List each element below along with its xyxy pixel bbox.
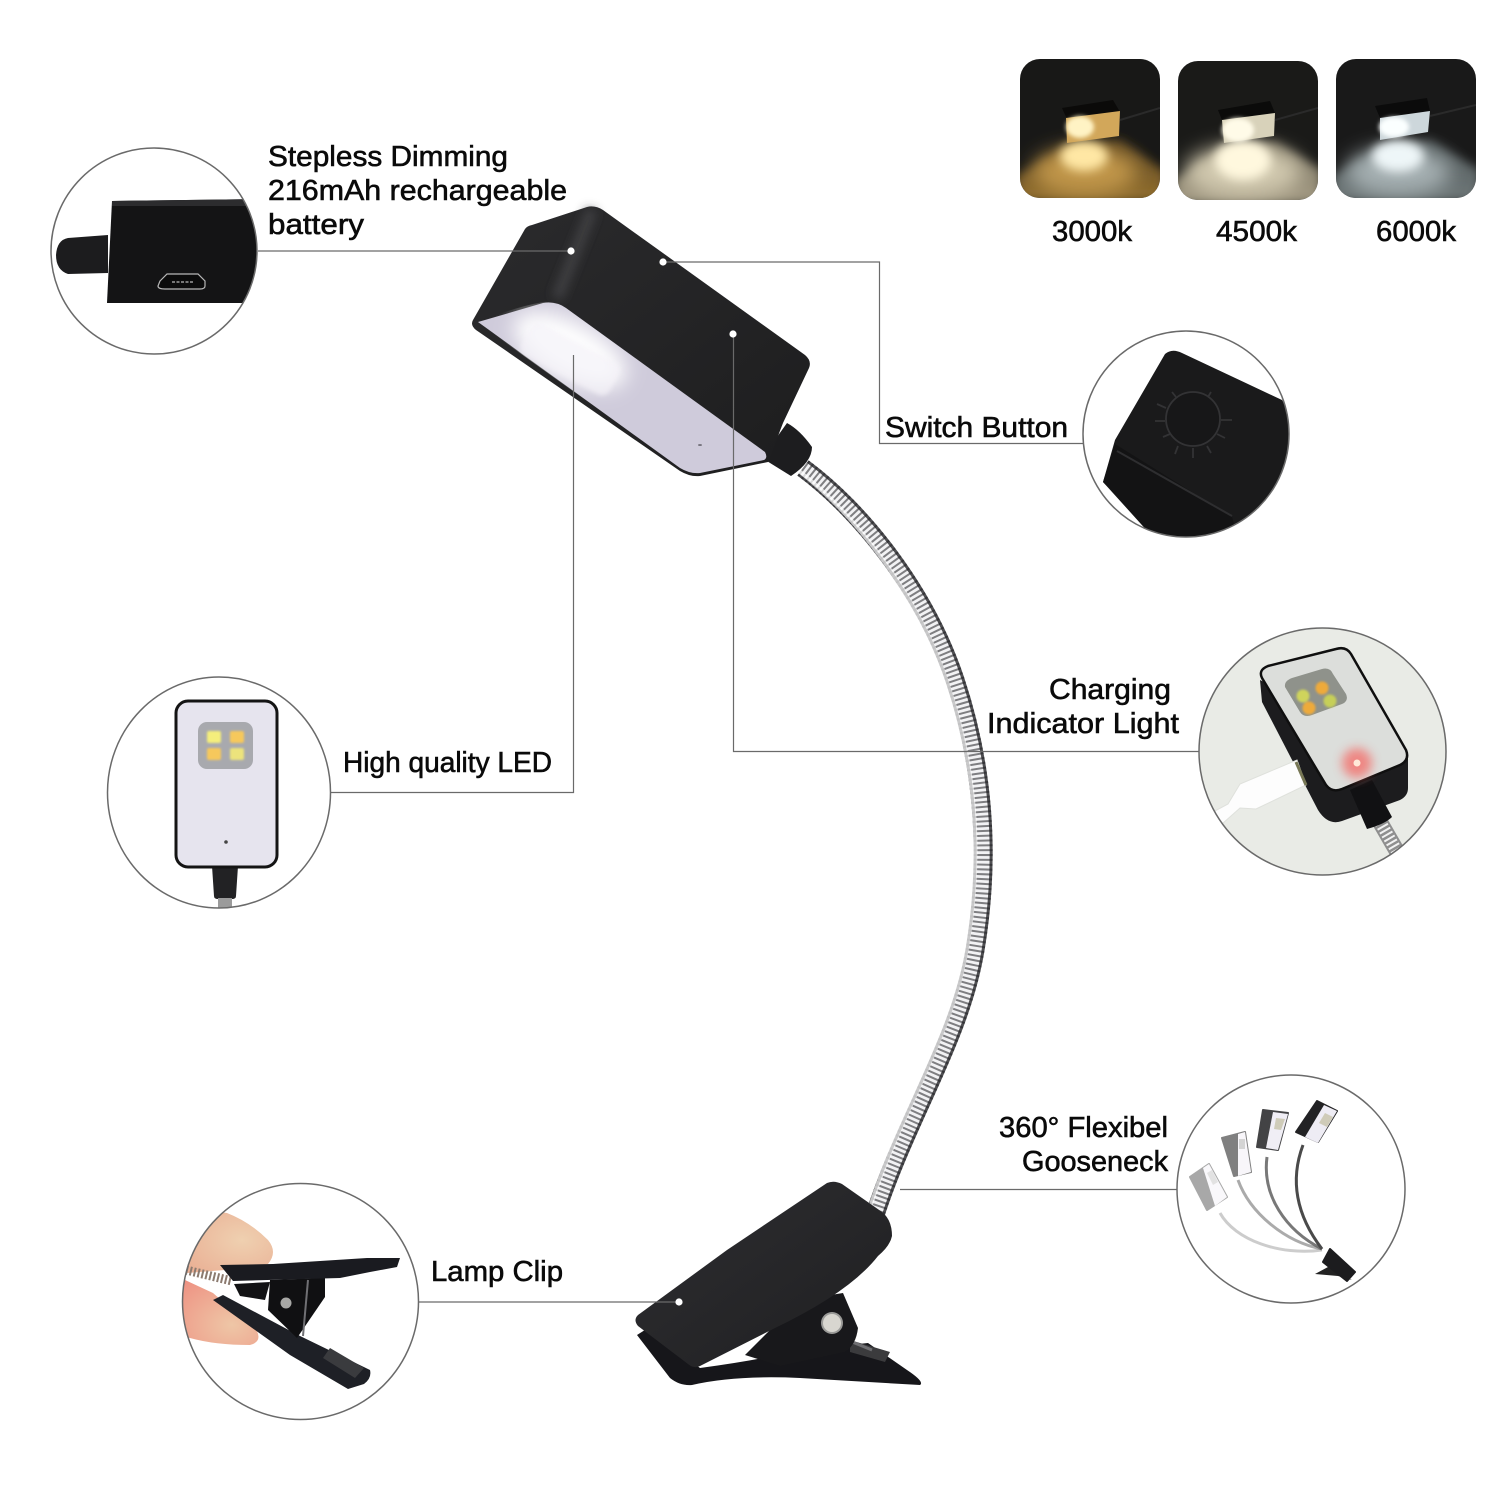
swatch photo 3000k <box>1016 59 1166 202</box>
label: 360 flexible gooseneck: Gooseneck <box>1022 1146 1168 1178</box>
lamp head ridge highlight <box>557 210 592 298</box>
label: 360 flexible gooseneck: 360° Flexibel <box>999 1112 1168 1144</box>
lamp glow <box>502 296 638 404</box>
callout: high quality LED <box>108 677 552 910</box>
clip top plate <box>636 1182 892 1367</box>
swatch label 3000k: 3000k <box>1052 216 1133 248</box>
inset circle: lamp positions <box>1177 1075 1405 1303</box>
label: stepless dimming <box>268 141 567 241</box>
lamp position 4 <box>1296 1101 1337 1249</box>
indicator pinhole <box>698 444 702 446</box>
label: charging indicator light <box>987 674 1179 740</box>
gooseneck arm <box>799 468 983 1218</box>
color temperature swatch: 4500k <box>1174 61 1322 248</box>
lamp position 1 <box>1190 1164 1322 1251</box>
swatch label 4500k: 4500k <box>1216 216 1298 248</box>
swatch label 6000k: 6000k <box>1376 216 1457 248</box>
inset circle: switch button <box>1083 331 1295 545</box>
swatch photo 6000k <box>1332 59 1480 202</box>
small clip <box>1315 1249 1355 1281</box>
clip pivot <box>745 1293 858 1366</box>
callout: flexible gooseneck <box>999 1075 1405 1303</box>
product: gooseneck lamp <box>472 206 983 1385</box>
clip spring details <box>835 1335 890 1362</box>
inset circle: micro USB port <box>51 148 262 354</box>
callout: lamp clip <box>170 1184 563 1420</box>
callout: switch button <box>885 331 1295 545</box>
inset circle: LED panel <box>108 677 330 910</box>
lamp head body <box>472 206 810 476</box>
lamp position 2 <box>1222 1132 1322 1249</box>
label: stepless dimming: battery <box>268 209 365 241</box>
indicator LED glow <box>1342 748 1372 778</box>
color temperature swatch: 3000k <box>1016 59 1166 248</box>
inset circle: hand pressing clip <box>170 1184 418 1420</box>
label: 360 flexible gooseneck <box>999 1112 1168 1178</box>
lamp light panel <box>478 303 766 473</box>
callout: charging indicator light <box>987 625 1450 880</box>
label: charging indicator light: Indicator Light <box>987 708 1179 740</box>
icon: sun dial <box>1155 392 1232 458</box>
leader end dots <box>567 247 737 1306</box>
label: lamp clip: Lamp Clip <box>431 1256 563 1288</box>
label: high quality LED: High quality LED <box>343 747 552 779</box>
color temperature swatch: 6000k <box>1332 59 1480 248</box>
label: switch button: Switch Button <box>885 412 1068 444</box>
lamp position 3 <box>1257 1110 1322 1249</box>
label: stepless dimming: Stepless Dimming <box>268 141 508 173</box>
inset circle: charging indicator <box>1195 625 1450 880</box>
clip base <box>637 1328 921 1385</box>
label: stepless dimming: 216mAh rechargeable <box>268 175 567 207</box>
label: charging indicator light: Charging <box>1049 674 1171 706</box>
swatch photo 4500k <box>1174 61 1322 204</box>
leader lines <box>258 251 1199 1302</box>
clip rivet <box>821 1312 843 1334</box>
callout: stepless dimming and battery <box>51 141 567 354</box>
lamp neck <box>762 423 812 476</box>
